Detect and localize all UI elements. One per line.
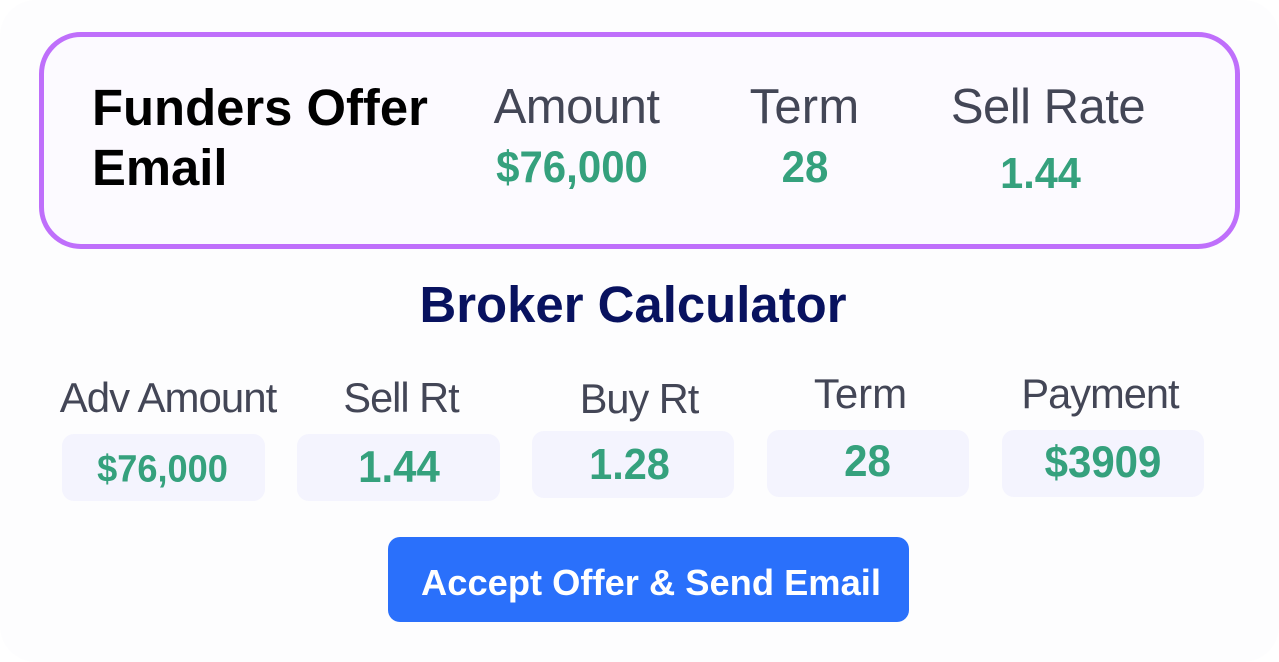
label: sell rt: Sell Rt (343, 374, 459, 421)
button: accept offer (388, 537, 909, 622)
label: buy rt: Buy Rt (580, 375, 698, 422)
value: term: 28 (844, 436, 891, 485)
panel: funders offer (39, 32, 1240, 249)
label: sell rate: Sell Rate (951, 80, 1145, 134)
heading: funders offer email (92, 79, 428, 196)
field: sell rt (297, 434, 500, 501)
button: accept offer: Accept Offer & Send Email (421, 562, 881, 603)
label: term: Term (750, 80, 859, 134)
label: term: Term (814, 370, 907, 417)
value: sell rt: 1.44 (358, 442, 440, 491)
label: adv amount: Adv Amount (60, 374, 276, 421)
field: buy rt (532, 431, 734, 498)
field: adv amount (62, 434, 265, 501)
field: payment (1002, 430, 1204, 497)
value: buy rt: 1.28 (589, 439, 670, 488)
heading: broker calculator: Broker Calculator (419, 276, 847, 333)
value: sell rate: 1.44 (1000, 148, 1081, 197)
heading: funders offer email: Email (92, 139, 228, 196)
value: payment: $3909 (1045, 437, 1161, 486)
label: amount: Amount (494, 80, 659, 134)
heading: funders offer email: Funders Offer (92, 79, 428, 136)
value: adv amount: $76,000 (97, 447, 228, 490)
value: term: 28 (782, 142, 828, 191)
field: term (767, 430, 969, 497)
label: payment: Payment (1021, 370, 1179, 417)
value: amount: $76,000 (496, 142, 648, 191)
